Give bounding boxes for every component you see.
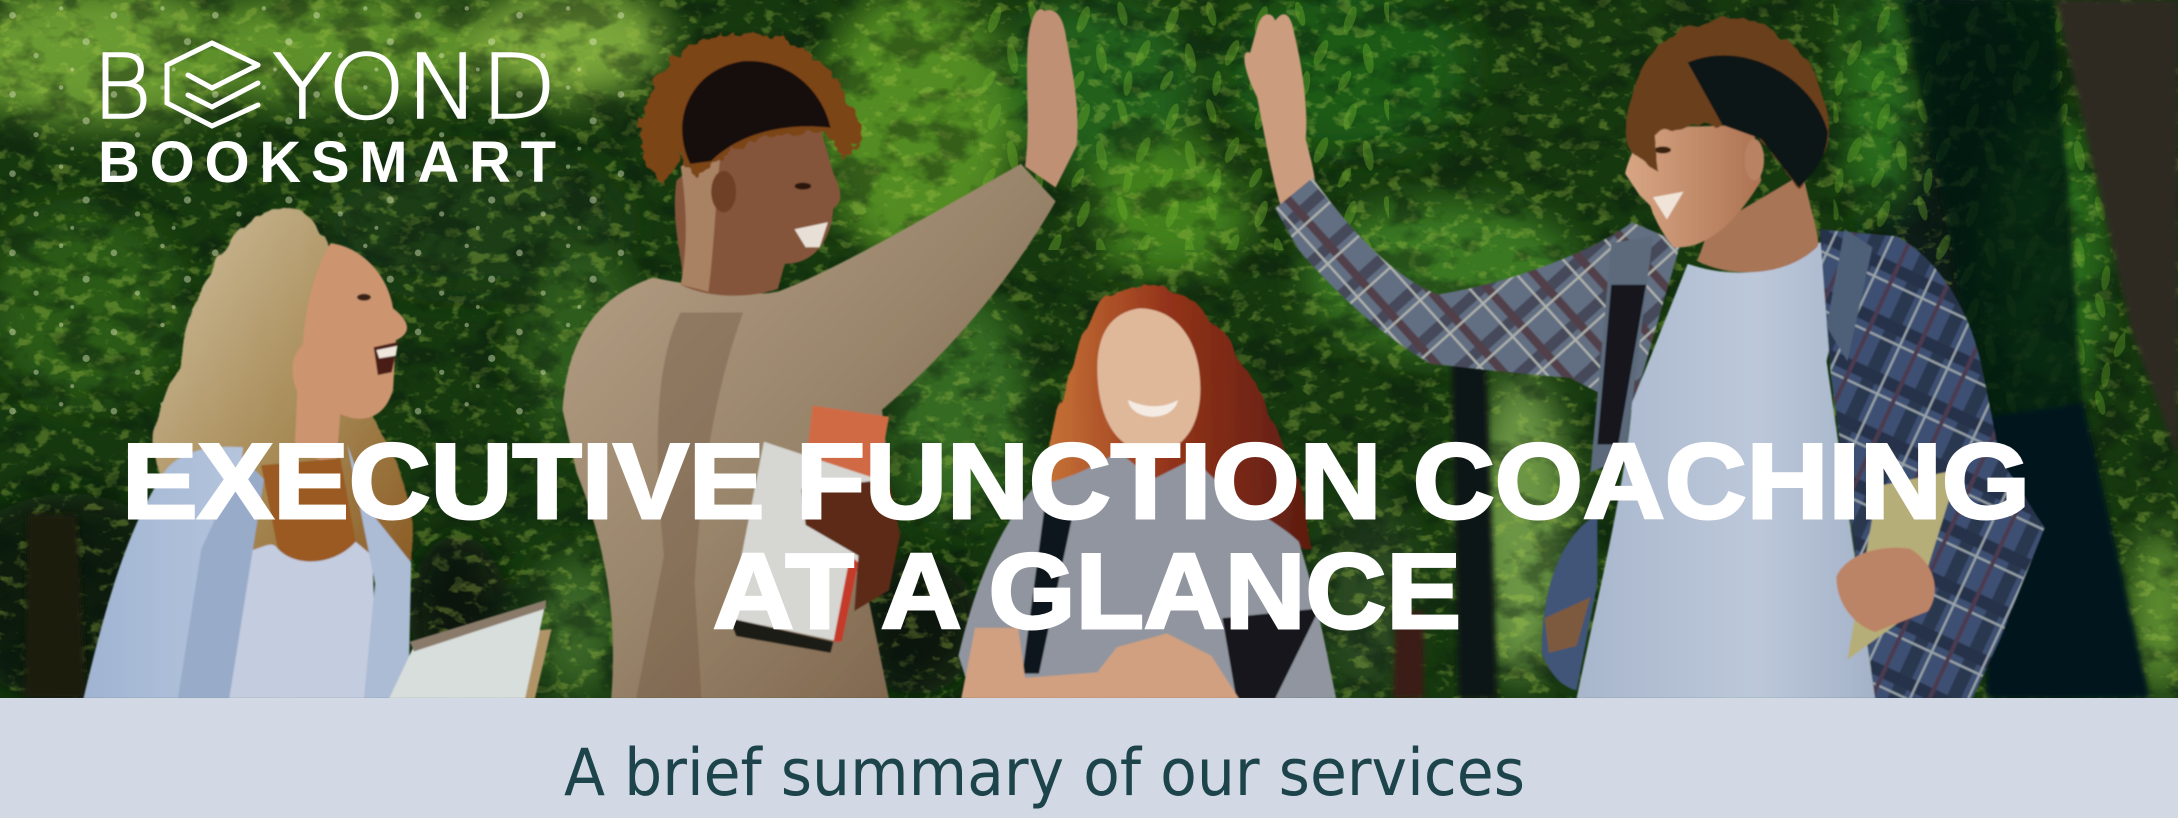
- title line one: EXECUTIVE FUNCTION COACHING: [122, 421, 2030, 541]
- logo wordmark: BOOKSMART: BOOKSMART: [98, 130, 556, 195]
- backpack: [1542, 514, 1597, 690]
- logo wordmark: BEYOND: YOND: [272, 35, 557, 139]
- student: boy in flannel shirt: [1244, 14, 2045, 699]
- logo wordmark: BEYOND: B: [92, 35, 152, 139]
- logo wordmark: BEYOND: [92, 35, 557, 139]
- student: red-haired girl: [958, 285, 1336, 699]
- subtitle text: A brief summary of our services: [564, 736, 1525, 811]
- neck and face: [1697, 174, 1818, 272]
- hair: [1625, 17, 1828, 188]
- right flannel: [1820, 229, 2045, 699]
- book and hand: [729, 406, 900, 653]
- subtitle band: [0, 698, 2178, 818]
- student: blonde girl: [83, 208, 551, 699]
- t-shirt: [1577, 236, 1875, 699]
- left sleeve: [1275, 178, 1681, 410]
- notebook: [389, 600, 551, 699]
- tan book and hand: [1836, 469, 1959, 660]
- title line two: AT A GLANCE: [713, 531, 1461, 651]
- curly hair: [641, 34, 861, 188]
- title: [122, 421, 2030, 651]
- raised hand: [1244, 14, 1316, 211]
- student: boy with curly hair: [563, 9, 1078, 699]
- logo icon: hexagon book stack: [167, 43, 258, 126]
- raised hand: [1025, 9, 1078, 188]
- neck and face: [675, 125, 840, 296]
- logo: Beyond BookSmart: [92, 35, 557, 195]
